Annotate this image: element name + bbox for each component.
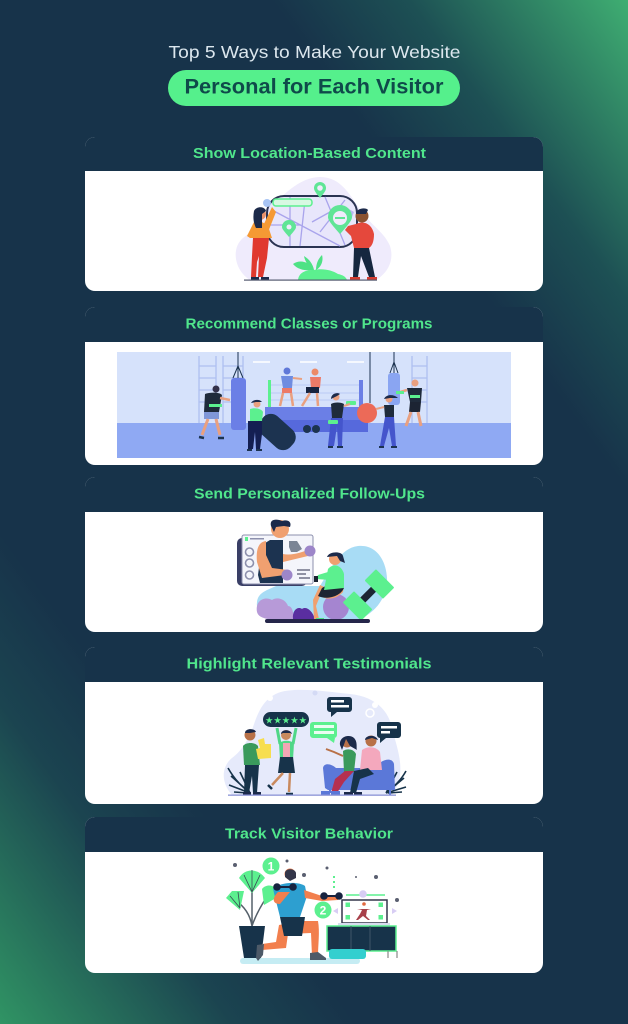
illustration: home workout bbox=[226, 858, 399, 964]
speed bag bbox=[357, 403, 377, 423]
kettlebells bbox=[303, 425, 311, 433]
title pill: Personal for Each Visitor bbox=[184, 76, 444, 98]
numbered badges: 1 bbox=[268, 860, 275, 874]
man lunging bbox=[262, 921, 319, 956]
sofa bbox=[323, 760, 395, 790]
rating pill bbox=[263, 712, 309, 727]
title bbox=[168, 42, 460, 106]
seated woman bbox=[342, 736, 352, 748]
heading: Highlight Relevant Testimonials bbox=[186, 656, 432, 672]
trainer bbox=[258, 540, 283, 583]
man at right bbox=[412, 380, 418, 386]
panel: recommend classes bbox=[85, 307, 543, 465]
numbered badges bbox=[262, 858, 280, 874]
gym ball bbox=[323, 594, 349, 620]
woman bbox=[262, 207, 276, 232]
pins bbox=[314, 182, 326, 198]
rating pill: ★★★★★ bbox=[265, 716, 307, 726]
panel: location-based content bbox=[85, 137, 543, 291]
speech bubbles bbox=[327, 697, 352, 717]
woman at speed bag bbox=[386, 396, 392, 402]
illustration: home workout: 2 bbox=[320, 904, 327, 918]
panel: track visitor behavior bbox=[85, 817, 543, 973]
man bbox=[356, 210, 368, 222]
slider bbox=[346, 894, 385, 896]
plant bbox=[235, 882, 268, 926]
tv bbox=[342, 900, 387, 923]
illustration: people with map bbox=[236, 177, 391, 281]
panel: personalized follow-ups bbox=[85, 477, 543, 632]
blue blob bbox=[257, 546, 387, 619]
seated man bbox=[366, 736, 376, 746]
heading: Track Visitor Behavior bbox=[225, 826, 393, 842]
palm leaves bbox=[228, 768, 250, 793]
dumbbell bbox=[343, 569, 394, 621]
woman cheering bbox=[281, 730, 291, 740]
floor bbox=[240, 958, 360, 964]
heading: Send Personalized Follow-Ups bbox=[194, 486, 425, 502]
ceiling lights bbox=[253, 361, 364, 363]
illustration: reviews bbox=[224, 690, 406, 796]
heading: Show Location-Based Content bbox=[193, 146, 426, 162]
boxers bbox=[284, 368, 290, 374]
pot bbox=[239, 926, 265, 958]
search bar bbox=[273, 199, 312, 206]
punching bags bbox=[233, 352, 398, 403]
illustration: gym bbox=[117, 352, 511, 458]
boxer trainee left bbox=[212, 386, 220, 392]
ring bbox=[269, 385, 361, 400]
purple plants bbox=[257, 598, 293, 619]
plant bbox=[298, 269, 347, 280]
cabinet bbox=[327, 926, 396, 951]
illustration: online trainer bbox=[237, 520, 394, 623]
tyre bbox=[254, 410, 300, 454]
title line: Top 5 Ways to Make Your Website bbox=[168, 42, 460, 62]
title pill bbox=[168, 70, 460, 106]
heading: Recommend Classes or Programs bbox=[186, 316, 432, 332]
decor dots bbox=[233, 863, 237, 867]
mat bbox=[329, 949, 366, 959]
shoes bbox=[256, 944, 264, 961]
woman with dumbbell bbox=[332, 394, 340, 400]
ladders bbox=[199, 356, 427, 423]
man with thumb bbox=[244, 730, 256, 740]
woman with tyre bbox=[254, 400, 260, 408]
dumbbells bbox=[273, 883, 281, 891]
woman exercising bbox=[313, 584, 344, 619]
panel: relevant testimonials bbox=[85, 647, 543, 804]
tablet bbox=[237, 538, 307, 586]
